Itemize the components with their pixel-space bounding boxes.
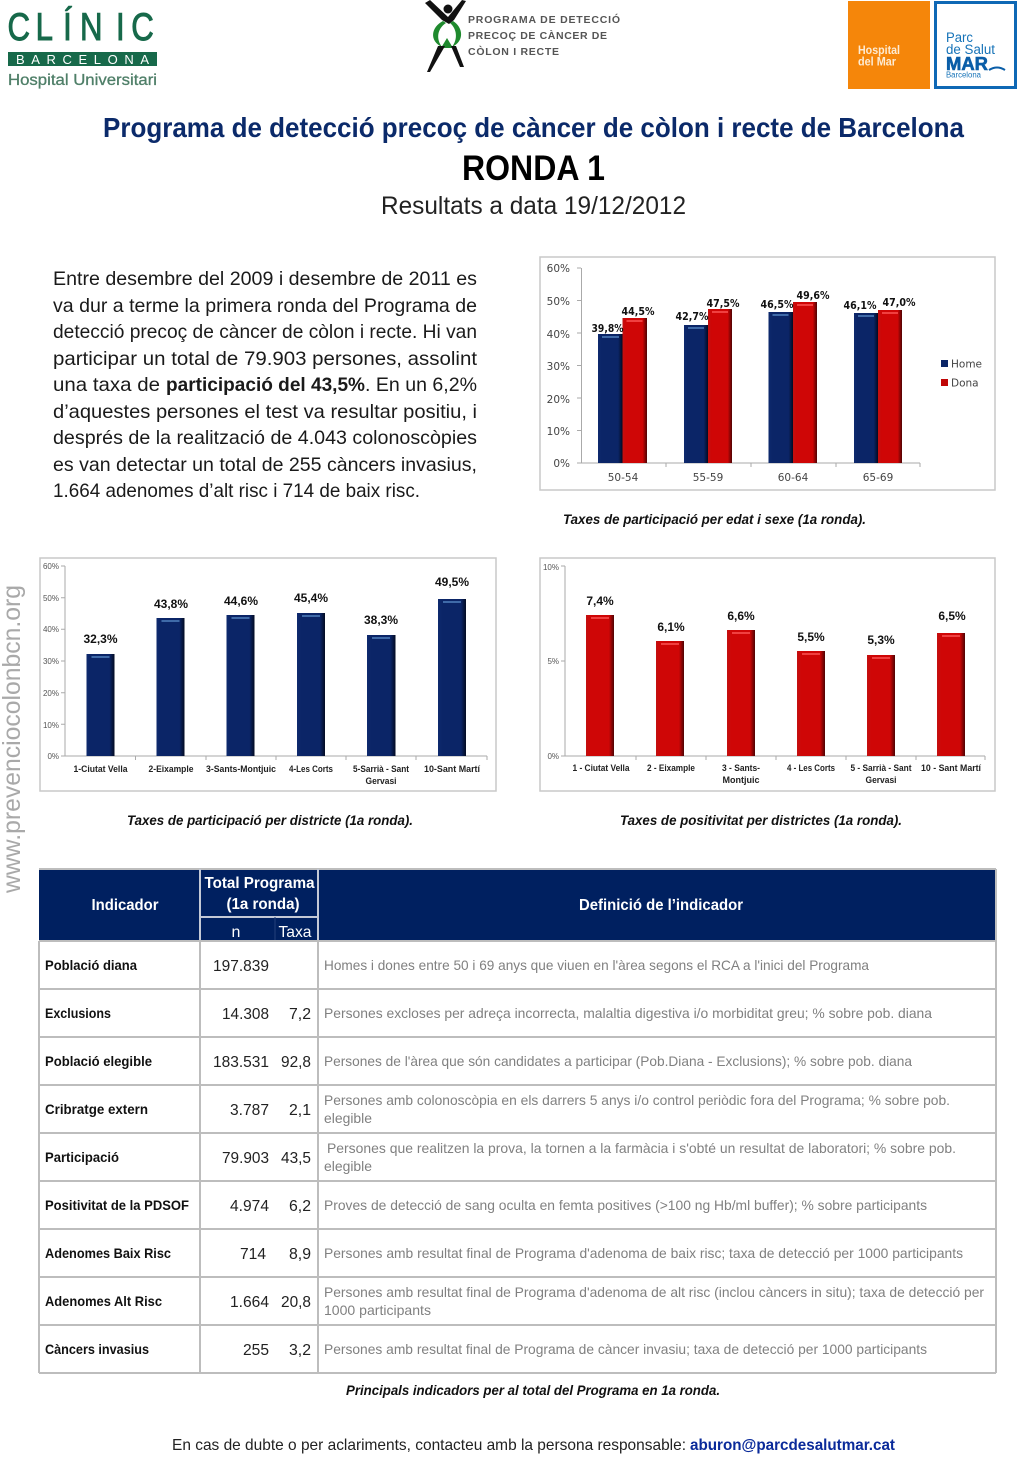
row: Cribratge extern: 3.787 (230, 1102, 269, 1119)
value labels: 47,5% (706, 298, 740, 310)
logo: Programa de detecció: PROGRAMA DE DETECCIÓ (468, 13, 620, 26)
bars (586, 615, 965, 756)
y axis labels: 60% (547, 263, 570, 275)
text block: summary: d’aquestes persones el test va resultar positiu, i (53, 401, 477, 423)
category labels: 1-Ciutat Vella (74, 764, 128, 774)
title: Resultats a data 19/12/2012 (381, 192, 686, 220)
logo: Parc de Salut Mar: MAR (946, 54, 988, 74)
category labels: 4-Les Corts (289, 764, 333, 774)
y axis labels: 20% (43, 689, 59, 698)
value labels: 32,3% (83, 632, 118, 646)
row: Participació: 43,5 (281, 1150, 311, 1167)
row: Adenomes Alt Risc: Adenomes Alt Risc (45, 1293, 162, 1309)
title: Programa de detecció precoç de càncer de còlon i recte de Barcelona (103, 112, 964, 143)
value labels (83, 575, 469, 646)
logo: Programa de detecció (425, 0, 620, 72)
row: Positivitat de la PDSOF (45, 1197, 927, 1215)
category labels (572, 763, 981, 785)
text block: summary (53, 268, 478, 502)
category labels: Gervasi (366, 776, 396, 786)
y axis labels: 30% (547, 361, 570, 373)
row: Adenomes Alt Risc: 1.664 (230, 1294, 269, 1311)
row: Adenomes Alt Risc: 1000 participants (324, 1302, 431, 1318)
text block: summary: participar un total de 79.903 persones, assolint (53, 348, 478, 370)
y axis labels: 40% (43, 625, 59, 634)
y axis labels: 20% (547, 394, 570, 406)
row: Adenomes Alt Risc (45, 1284, 984, 1318)
row: Població diana: 197.839 (213, 958, 269, 975)
table header (39, 869, 996, 941)
title: RONDA 1 (462, 149, 605, 188)
row: Càncers invasius: Càncers invasius (45, 1341, 149, 1357)
value labels: 46,1% (844, 300, 877, 312)
text block: summary: una taxa de (53, 374, 160, 396)
table header: Definició de l’indicador (579, 897, 743, 914)
row: Població elegible (45, 1053, 912, 1071)
category labels: Montjuic (722, 775, 760, 785)
row: Població elegible: 92,8 (281, 1054, 311, 1071)
table header: Indicador (92, 897, 158, 914)
y axis labels: 30% (43, 657, 59, 666)
category labels: 1 - Ciutat Vella (572, 763, 630, 773)
bars (86, 599, 466, 756)
value labels: 6,1% (657, 620, 685, 634)
row: Càncers invasius: Persones amb resultat final de Programa de càncer invasiu; taxa de detecció per 1000 participants (324, 1341, 927, 1357)
row: Càncers invasius: 3,2 (289, 1342, 311, 1359)
row: Població diana (45, 957, 869, 975)
logo: Hospital del Mar (848, 1, 930, 89)
value labels: 45,4% (294, 591, 328, 605)
row: Població diana: Població diana (45, 957, 137, 973)
value labels: 38,3% (364, 613, 398, 627)
text block: summary: participació del 43,5% (166, 374, 365, 396)
text block: summary: va dur a terme la primera ronda del Programa de (53, 295, 477, 317)
row: Cribratge extern: Cribratge extern (45, 1101, 148, 1117)
y axis labels (43, 562, 59, 761)
logo: Clínic Barcelona: Hospital Universitari (8, 72, 157, 89)
row: Participació: elegible (324, 1158, 372, 1174)
text block: summary: després de la realització de 4.043 colonoscòpies (53, 427, 477, 449)
row: Adenomes Alt Risc: Persones amb resultat final de Programa d'adenoma de alt risc (inclou càncers in situ); taxa de detecció per (324, 1284, 984, 1300)
row: Població elegible: Població elegible (45, 1053, 152, 1069)
table header: Taxa (278, 924, 312, 941)
row: Cribratge extern: elegible (324, 1110, 372, 1126)
y axis labels: 0% (547, 752, 559, 761)
category labels (74, 764, 480, 786)
category labels: 10-Sant Martí (424, 764, 480, 774)
row: Positivitat de la PDSOF: 4.974 (230, 1198, 269, 1215)
legend (941, 358, 982, 390)
text block: summary: 1.664 adenomes d’alt risc i 714 de baix risc. (53, 480, 420, 502)
y axis labels: 10% (543, 563, 559, 572)
logo: Programa de detecció: PRECOÇ DE CÀNCER DE (468, 29, 607, 42)
row: Participació: 79.903 (222, 1150, 269, 1167)
row: Adenomes Baix Risc: Persones amb resultat final de Programa d'adenoma de baix risc; taxa de detecció per 1000 participants (324, 1245, 963, 1261)
y axis labels: 5% (547, 657, 559, 666)
row: Positivitat de la PDSOF: Positivitat de la PDSOF (45, 1197, 189, 1213)
logo: Clínic Barcelona: BARCELONA (16, 52, 149, 67)
text block: summary: es van detectar un total de 255 càncers invasius, (53, 454, 477, 476)
logo: Clínic Barcelona (8, 6, 157, 89)
value labels: 49,5% (435, 575, 469, 589)
legend: Dona (951, 378, 979, 390)
bar chart: positivity by district (540, 558, 995, 791)
logo: Programa de detecció: CÒLON I RECTE (468, 45, 559, 58)
icon: figure (425, 0, 466, 72)
y axis labels (547, 263, 570, 470)
row: Exclusions: 7,2 (289, 1006, 311, 1023)
table header: n (232, 924, 240, 941)
value labels (586, 594, 966, 647)
row: Adenomes Baix Risc: 8,9 (289, 1246, 311, 1263)
category labels: 2-Eixample (148, 764, 194, 774)
value labels: 44,5% (622, 306, 655, 318)
y axis labels: 10% (43, 721, 59, 730)
footer contact: En cas de dubte o per aclariments, contacteu amb la persona responsable: (172, 1437, 686, 1454)
row: Exclusions (45, 1005, 932, 1023)
row: Exclusions: Persones excloses per adreça incorrecta, malaltia digestiva i/o morbiditat greu; % sobre pob. diana (324, 1005, 932, 1021)
y axis labels: 60% (43, 562, 59, 571)
y axis labels: 10% (547, 426, 570, 438)
y axis labels: 0% (553, 458, 570, 470)
logo: Parc de Salut Mar: de Salut (946, 42, 995, 57)
row: Participació (45, 1140, 956, 1174)
logo: Parc de Salut Mar (936, 2, 1016, 88)
row: Participació: Participació (45, 1149, 119, 1165)
y axis labels: 50% (547, 296, 570, 308)
row: Cribratge extern (45, 1092, 950, 1126)
category labels: Gervasi (866, 775, 896, 785)
row: Adenomes Alt Risc: 20,8 (281, 1294, 311, 1311)
caption: chart age and sex: Taxes de participació per edat i sexe (1a ronda). (563, 511, 866, 527)
bar chart: participation by district (40, 558, 496, 791)
category labels: 3-Sants-Montjuic (206, 764, 276, 774)
logo: Hospital del Mar: Hospital (858, 45, 900, 57)
logo: Parc de Salut Mar: Barcelona (946, 70, 982, 80)
row: Positivitat de la PDSOF: Proves de detecció de sang oculta en femta positives (>100 ng Hb/ml buffer); % sobre participants (324, 1197, 927, 1213)
y axis labels: 50% (43, 594, 59, 603)
category labels: 5-Sarrià - Sant (353, 764, 409, 774)
text block: summary: . En un 6,2% (365, 374, 477, 396)
row: Exclusions: 14.308 (222, 1006, 269, 1023)
text block: summary: detecció precoç de càncer de còlon i recte. Hi van (53, 321, 477, 343)
value labels: 49,6% (796, 290, 830, 302)
row: Cribratge extern: 2,1 (289, 1102, 311, 1119)
category labels: 10 - Sant Martí (921, 763, 981, 773)
y axis labels: 40% (547, 329, 570, 341)
logo: Parc de Salut Mar: Parc (946, 30, 973, 45)
category labels: 3 - Sants- (722, 763, 760, 773)
category labels: 5 - Sarrià - Sant (850, 763, 912, 773)
logo: Hospital del Mar: del Mar (858, 56, 896, 68)
logo: Clínic Barcelona: CLÍNIC (8, 6, 154, 49)
value labels: 39,8% (592, 323, 624, 335)
category labels: 65-69 (863, 472, 893, 484)
value labels: 42,7% (676, 311, 709, 323)
footer contact: aburon@parcdesalutmar.cat (690, 1437, 896, 1454)
value labels (592, 290, 916, 335)
value labels: 5,3% (867, 633, 895, 647)
row: Positivitat de la PDSOF: 6,2 (289, 1198, 311, 1215)
table grid (39, 869, 996, 1373)
category labels (608, 472, 893, 484)
bar chart: participation by age and sex (540, 257, 995, 490)
row: Població diana: Homes i dones entre 50 i 69 anys que viuen en l'àrea segons el RCA a l'inici del Programa (324, 957, 869, 973)
value labels: 43,8% (154, 597, 188, 611)
title (103, 112, 964, 220)
y axis labels (543, 563, 559, 761)
bars (598, 302, 902, 463)
row: Participació: Persones que realitzen la prova, la tornen a la farmàcia i s'obté un resultat de laboratori; % sobre pob. (327, 1140, 956, 1156)
category labels: 55-59 (693, 472, 723, 484)
value labels: 6,6% (727, 609, 755, 623)
row: Adenomes Baix Risc: Adenomes Baix Risc (45, 1245, 171, 1261)
caption: chart participation district: Taxes de participació per districte (1a ronda). (127, 812, 413, 828)
value labels: 5,5% (797, 630, 825, 644)
row: Població elegible: Persones de l'àrea que són candidates a participar (Pob.Diana - Exclusions); % sobre pob. diana (324, 1053, 912, 1069)
table header: (1a ronda) (226, 896, 300, 913)
value labels: 47,0% (882, 297, 916, 309)
y axis labels: 0% (47, 752, 59, 761)
row: Càncers invasius (45, 1341, 927, 1359)
table: indicators (39, 869, 996, 1373)
value labels: 6,5% (938, 609, 966, 623)
text block: summary: Entre desembre del 2009 i desembre de 2011 es (53, 268, 477, 290)
value labels: 44,6% (224, 594, 258, 608)
row: Adenomes Baix Risc (45, 1245, 963, 1263)
category labels: 2 - Eixample (647, 763, 695, 773)
value labels: 46,5% (760, 299, 794, 311)
legend: Home (951, 358, 982, 370)
row: Càncers invasius: 255 (243, 1342, 269, 1359)
category labels: 4 - Les Corts (787, 763, 835, 773)
category labels: 50-54 (608, 472, 639, 484)
table header: Total Programa (204, 875, 315, 892)
caption: table: Principals indicadors per al total del Programa en 1a ronda. (346, 1382, 720, 1398)
row: Adenomes Baix Risc: 714 (240, 1246, 266, 1263)
row: Exclusions: Exclusions (45, 1005, 111, 1021)
row: Cribratge extern: Persones amb colonoscòpia en els darrers 5 anys i/o control periòdic fora del Programa; % sobre pob. (324, 1092, 950, 1108)
caption: chart positivity district: Taxes de positivitat per districtes (1a ronda). (620, 812, 902, 828)
row: Població elegible: 183.531 (213, 1054, 269, 1071)
value labels: 7,4% (586, 594, 614, 608)
category labels: 60-64 (778, 472, 809, 484)
